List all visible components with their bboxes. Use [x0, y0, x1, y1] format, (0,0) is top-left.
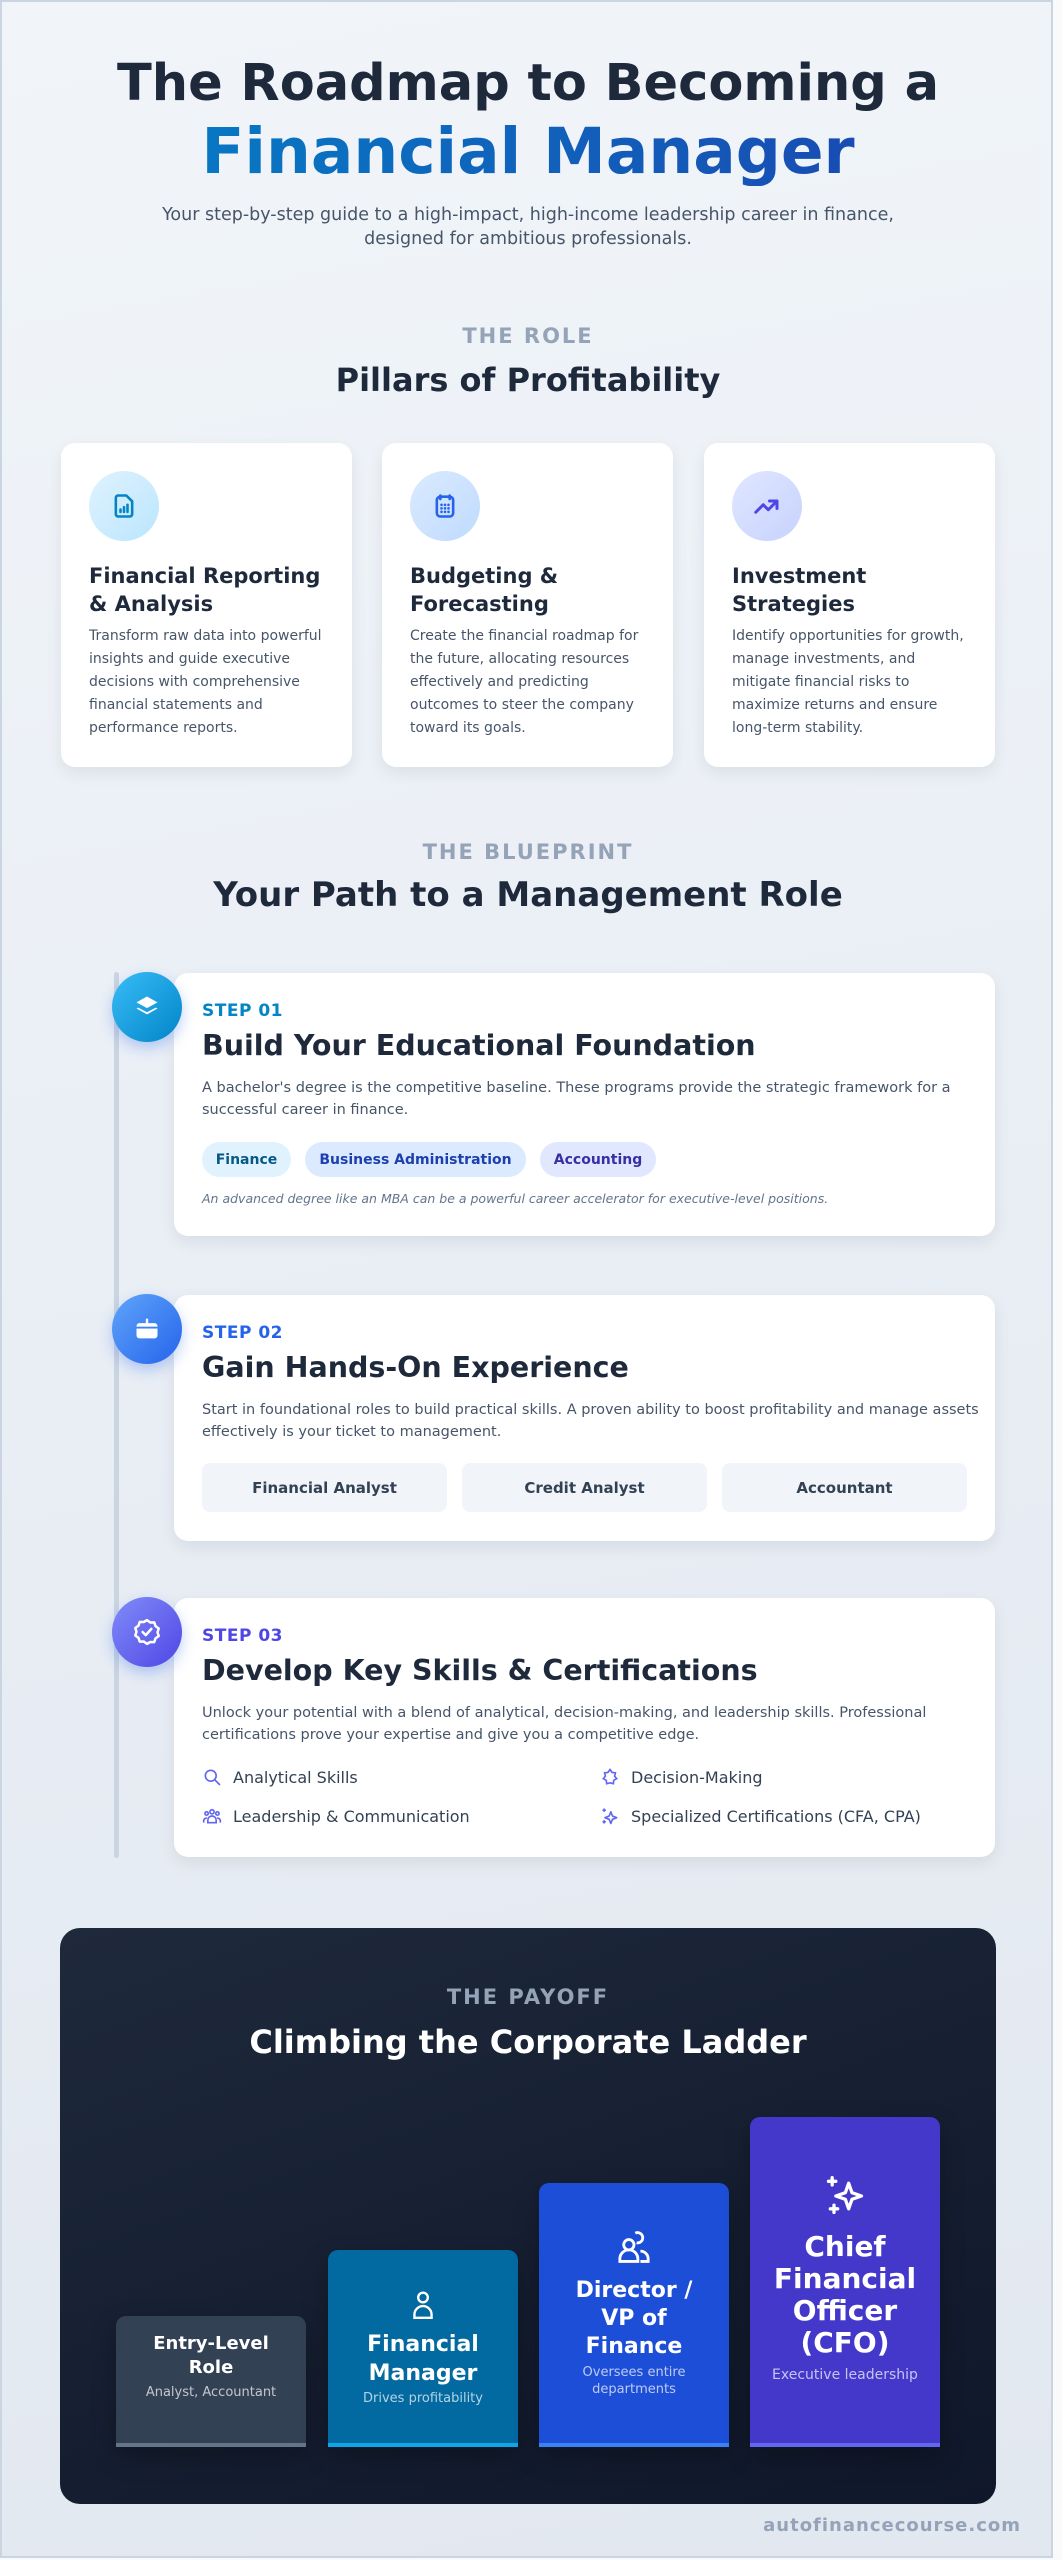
bar: director: Finance [586, 2334, 682, 2359]
title: Financial Manager [201, 115, 855, 188]
pill: accounting: Accounting [554, 1152, 642, 1168]
bar: cfo: Officer [793, 2294, 897, 2327]
card title [410, 564, 558, 616]
icon: trend [732, 471, 802, 541]
heading: path: Your Path to a Management Role [213, 875, 843, 915]
heading: pillars: Pillars of Profitability [336, 361, 720, 399]
icon: calculator [410, 471, 480, 541]
card title: Financial Reporting & Analysis [89, 564, 320, 616]
step 2 card [174, 1295, 995, 1541]
label: STEP 03 [202, 1626, 283, 1646]
skill: decision: Decision-Making [631, 1768, 763, 1786]
card title [732, 564, 866, 616]
bar: financial manager: Financial [367, 2332, 479, 2357]
icon: people [618, 2231, 650, 2263]
subtitle: Your step-by-step guide to a high-impact, high-income leadership career in finance, designed for ambitious professionals. [162, 205, 894, 249]
card title: Strategies [732, 592, 855, 616]
bar: director: Oversees entire [583, 2365, 685, 2380]
bar: director: Director / [576, 2278, 692, 2303]
pill: finance [202, 1142, 291, 1177]
footer: website: autofinancecourse.com [763, 2515, 1021, 2536]
card text: Identify opportunities for growth, manage investments, and mitigate financial risks to maximize returns and ensure long-term stability. [732, 628, 964, 736]
heading: ladder: Climbing the Corporate Ladder [249, 2023, 807, 2061]
bar: entry level: Role [189, 2357, 233, 2378]
bar: cfo: Chief [804, 2230, 886, 2263]
label: STEP 02 [202, 1323, 283, 1343]
skill: leadership: Leadership & Communication [233, 1806, 470, 1826]
bar: financial manager: Manager [369, 2361, 477, 2386]
title [117, 54, 939, 188]
icon: person [413, 2292, 433, 2319]
step 3 card [174, 1598, 995, 1857]
heading: Develop Key Skills & Certifications [202, 1654, 758, 1687]
skill: analytical: Analytical Skills [233, 1768, 358, 1786]
skill: certifications: Specialized Certifications (CFA, CPA) [631, 1806, 921, 1826]
bar: financial manager [328, 2250, 518, 2447]
role: credit [462, 1463, 707, 1512]
pill: business [305, 1142, 526, 1177]
icon: step 1 [112, 972, 182, 1042]
paragraph: Start in foundational roles to build practical skills. A proven ability to boost profitability and manage assets effectively is your ticket to management. [202, 1402, 979, 1440]
bar: entry level [116, 2316, 306, 2447]
card title: Budgeting & [410, 564, 558, 588]
bar: entry level: Entry-Level [153, 2333, 269, 2354]
step 1 card [174, 973, 995, 1236]
eyebrow: payoff: THE PAYOFF [447, 1985, 609, 2009]
bar: cfo: (CFO) [800, 2326, 890, 2359]
pill: accounting [540, 1142, 656, 1177]
eyebrow: blueprint: THE BLUEPRINT [423, 840, 633, 864]
pill: finance: Finance [216, 1152, 277, 1168]
bar: director: VP of [601, 2306, 667, 2331]
bar: entry level: Analyst, Accountant [146, 2385, 276, 2400]
card: budgeting [382, 443, 673, 767]
card title: Forecasting [410, 592, 549, 616]
bar: director [539, 2183, 729, 2447]
icon: step 2 [112, 1294, 182, 1364]
bar: director: departments [592, 2382, 676, 2397]
card title: Investment [732, 564, 866, 588]
icon: sparkles [826, 2176, 864, 2214]
heading: Build Your Educational Foundation [202, 1029, 756, 1062]
label: STEP 01 [202, 1001, 283, 1021]
role: accountant [722, 1463, 967, 1512]
icon: report [89, 471, 159, 541]
note: An advanced degree like an MBA can be a powerful career accelerator for executive-level positions. [202, 1191, 828, 1206]
paragraph: A bachelor's degree is the competitive baseline. These programs provide the strategic framework for a successful career in finance. [202, 1080, 951, 1118]
role: credit: Credit Analyst [524, 1478, 645, 1496]
panel: payoff [60, 1928, 996, 2504]
title: The Roadmap to Becoming a [117, 54, 939, 113]
bar: cfo: Executive leadership [772, 2367, 918, 2383]
pill: business: Business Administration [319, 1152, 512, 1168]
heading: Gain Hands-On Experience [202, 1351, 629, 1384]
eyebrow: the role: THE ROLE [462, 324, 594, 348]
role: analyst [202, 1463, 447, 1512]
role: accountant: Accountant [796, 1478, 893, 1496]
icon: step 3 [112, 1597, 182, 1667]
panel: pillar cards [60, 443, 996, 774]
bar: cfo: Financial [774, 2262, 916, 2295]
role: analyst: Financial Analyst [252, 1478, 397, 1496]
bar: financial manager: Drives profitability [363, 2391, 483, 2406]
paragraph: Unlock your potential with a blend of analytical, decision-making, and leadership skills. Professional certifications prove your expertise and give you a competitive edge. [202, 1705, 926, 1743]
card: investment [704, 443, 995, 767]
card text: Transform raw data into powerful insights and guide executive decisions with comprehensive financial statements and performance reports. [89, 628, 322, 736]
card text: Create the financial roadmap for the future, allocating resources effectively and predicting outcomes to steer the company toward its goals. [410, 628, 638, 736]
bar: cfo [750, 2117, 940, 2447]
card: financial reporting [61, 443, 352, 767]
timeline line [114, 972, 119, 1858]
